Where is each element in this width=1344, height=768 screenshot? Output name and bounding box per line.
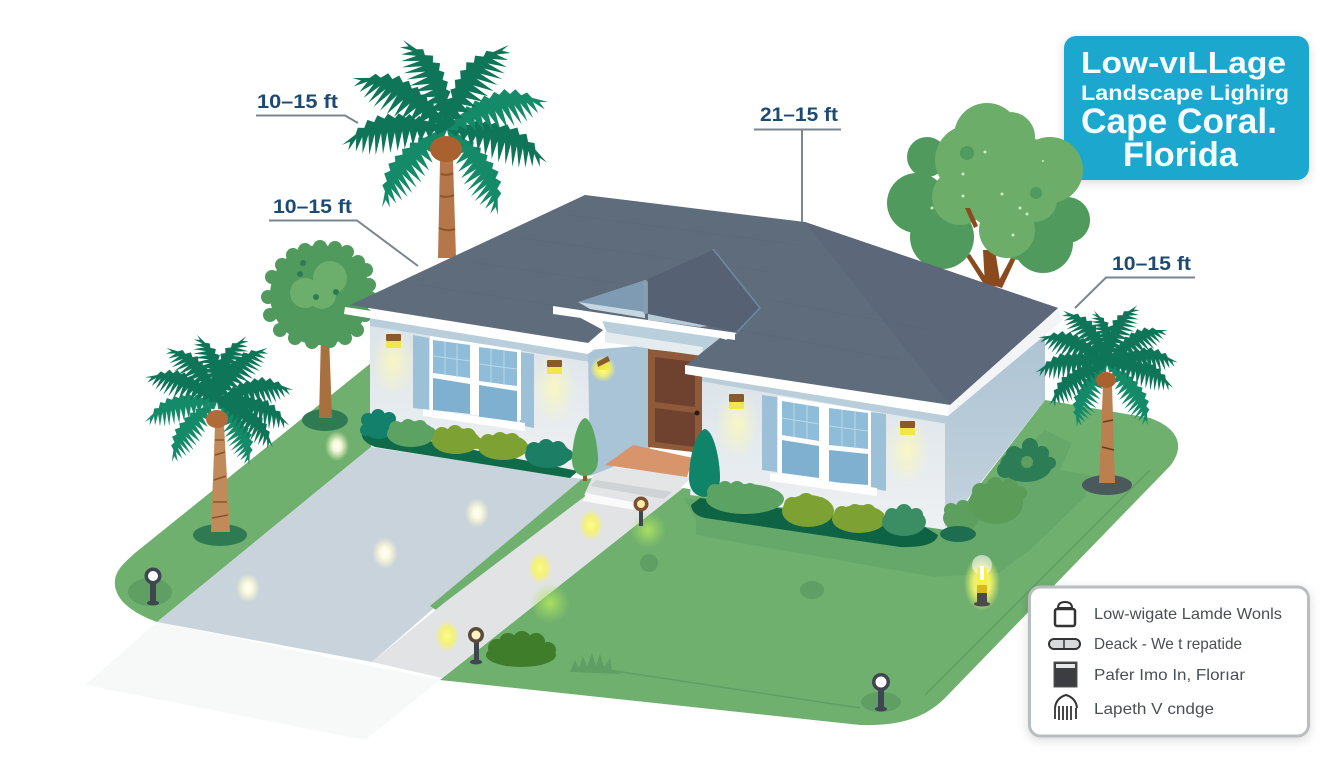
bollard light: [964, 555, 1000, 611]
legend row 2: Deack - We t repatide: [1094, 636, 1242, 653]
roof main surface: [350, 195, 1058, 405]
callout: height right: 10–15 ft: [1112, 254, 1192, 275]
fascia: gable: [553, 306, 735, 340]
title panel: Florida: [1123, 136, 1239, 174]
callout: height top left: [256, 92, 358, 123]
legend panel: [1030, 587, 1308, 736]
path light: walkway top: [634, 496, 648, 526]
legend row 1: [1055, 602, 1282, 626]
fascia: right front: [685, 365, 950, 416]
green sliver between driveway and walkway: [430, 477, 608, 610]
shrubs: right bed: [689, 429, 938, 547]
cone shrub: left of door: [572, 418, 598, 481]
entry landing: [583, 465, 692, 510]
walkway: [372, 488, 683, 678]
fascia: left: [344, 307, 605, 354]
entry white band: [603, 332, 703, 356]
lawn: main: [440, 400, 1178, 725]
eave shadow right: [700, 368, 947, 424]
tree: round left: [261, 240, 377, 431]
shrubs: side of house: [940, 438, 1056, 542]
path light: walkway bottom: [468, 627, 484, 664]
lawn shadow beside house: [684, 430, 1090, 577]
roof right hip: [805, 222, 1058, 405]
roof: [344, 195, 1063, 416]
bush: front lawn: [486, 631, 556, 667]
title panel: [1064, 36, 1309, 180]
title panel: Low-vıLLage: [1081, 45, 1286, 80]
fascia: right side: [948, 309, 1063, 416]
lawn spots: [128, 554, 901, 712]
wall lights: [371, 326, 929, 486]
eave shadow bands: [370, 313, 590, 362]
right window: [762, 395, 886, 496]
wall: right front: [690, 368, 947, 530]
entry soffit: [602, 320, 720, 353]
grass tuft: [570, 653, 622, 674]
legend row 1: Low-wigate Lamde Wonls: [1094, 606, 1282, 623]
palm tree: right: [1034, 298, 1178, 495]
door: [648, 349, 702, 453]
ground light pools: [236, 431, 666, 652]
title panel: Cape Coral.: [1081, 102, 1277, 141]
wall: side: [945, 335, 1045, 528]
path light: lawn: [872, 673, 890, 712]
driveway: [157, 447, 582, 662]
left window: [413, 335, 534, 431]
tree: large right: [887, 103, 1090, 288]
house body: [370, 313, 1045, 530]
lawn: left strip: [115, 363, 371, 622]
legend row 4: [1055, 695, 1214, 720]
callout: height top left: 10–15 ft: [257, 92, 339, 113]
ghost pavement apron: [85, 622, 440, 740]
callout: height left: 10–15 ft: [273, 197, 353, 218]
palm tree: centre top: [339, 30, 554, 258]
path light: far left: [144, 568, 162, 606]
wall: left front: [370, 315, 590, 478]
legend row 3: [1054, 662, 1246, 687]
door step: [605, 445, 693, 477]
callout: height top centre: [754, 105, 841, 222]
callout: height top centre: 21–15 ft: [760, 105, 839, 126]
callout: height right: [1075, 254, 1195, 308]
entry recess: [588, 345, 650, 476]
legend row 4: Lapeth V cndge: [1094, 701, 1214, 718]
legend row 3: Pafer Imo In, Florıar: [1094, 667, 1246, 684]
lawn edge lines: [595, 470, 1150, 708]
gable dark face: [648, 250, 760, 332]
palm tree: left: [140, 329, 295, 546]
gable window: [578, 280, 717, 325]
callout: height left: [269, 197, 418, 266]
title panel: Landscape Lighirg: [1081, 82, 1289, 105]
shrubs: left bed: [360, 409, 578, 478]
lower roof piece: [685, 338, 745, 372]
roof shingle lines: [420, 215, 930, 360]
